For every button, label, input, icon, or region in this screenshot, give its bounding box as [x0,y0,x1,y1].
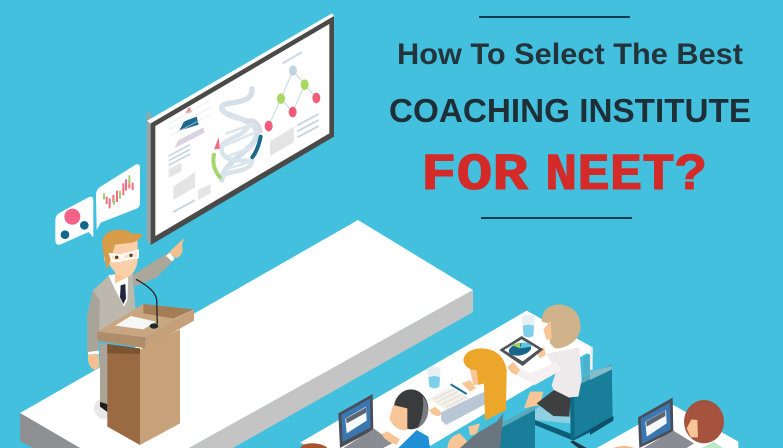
divider: bottom rule [481,217,632,219]
raised arm and pointing hand [132,238,184,287]
desk [597,405,738,448]
chair: right edge of first row [590,347,613,435]
student shoulder [613,446,635,448]
heading line 3: FOR [421,146,529,205]
notepad and pen [428,384,477,416]
bubble: candlestick chart [96,164,140,230]
second student desk [590,347,738,448]
microphone base [150,323,158,329]
icon: DNA helix [213,89,261,180]
stage platform [20,220,473,448]
speech bubbles [55,164,140,245]
title block [389,16,751,219]
student desk row [300,304,613,448]
paper on lectern [115,316,156,329]
heading line 1: How To Select The Best [397,38,743,71]
bubble: network [55,197,93,245]
desk [300,311,593,448]
water glass: back [522,315,535,337]
chart: pyramid on screen [168,100,210,148]
teacher torso [87,273,136,370]
heading line 3: NEET? [545,146,707,205]
chair: back right [535,364,613,448]
student: blonde woman [429,348,507,448]
text blocks on screen left [169,145,211,212]
heading line 2: COACHING INSTITUTE [389,92,751,129]
text blocks on screen right [270,114,319,156]
laptop [638,398,694,448]
chair: front middle [493,406,535,448]
water glass: middle [427,366,441,388]
divider: top rule [479,16,630,18]
teacher legs [100,343,110,412]
student: boy with laptop [338,389,430,448]
teacher at lectern [87,230,194,445]
presentation screen [147,13,335,245]
heading line 3 [421,146,707,205]
lectern [97,304,194,445]
tablet with pie chart [499,336,543,366]
student: back woman [507,304,589,417]
microphone [136,279,157,324]
network diagram on screen [265,52,320,131]
student head at bottom edge [300,443,327,448]
student: red-haired woman [684,400,724,448]
shadow under teacher [94,397,119,420]
teacher head [102,230,143,283]
